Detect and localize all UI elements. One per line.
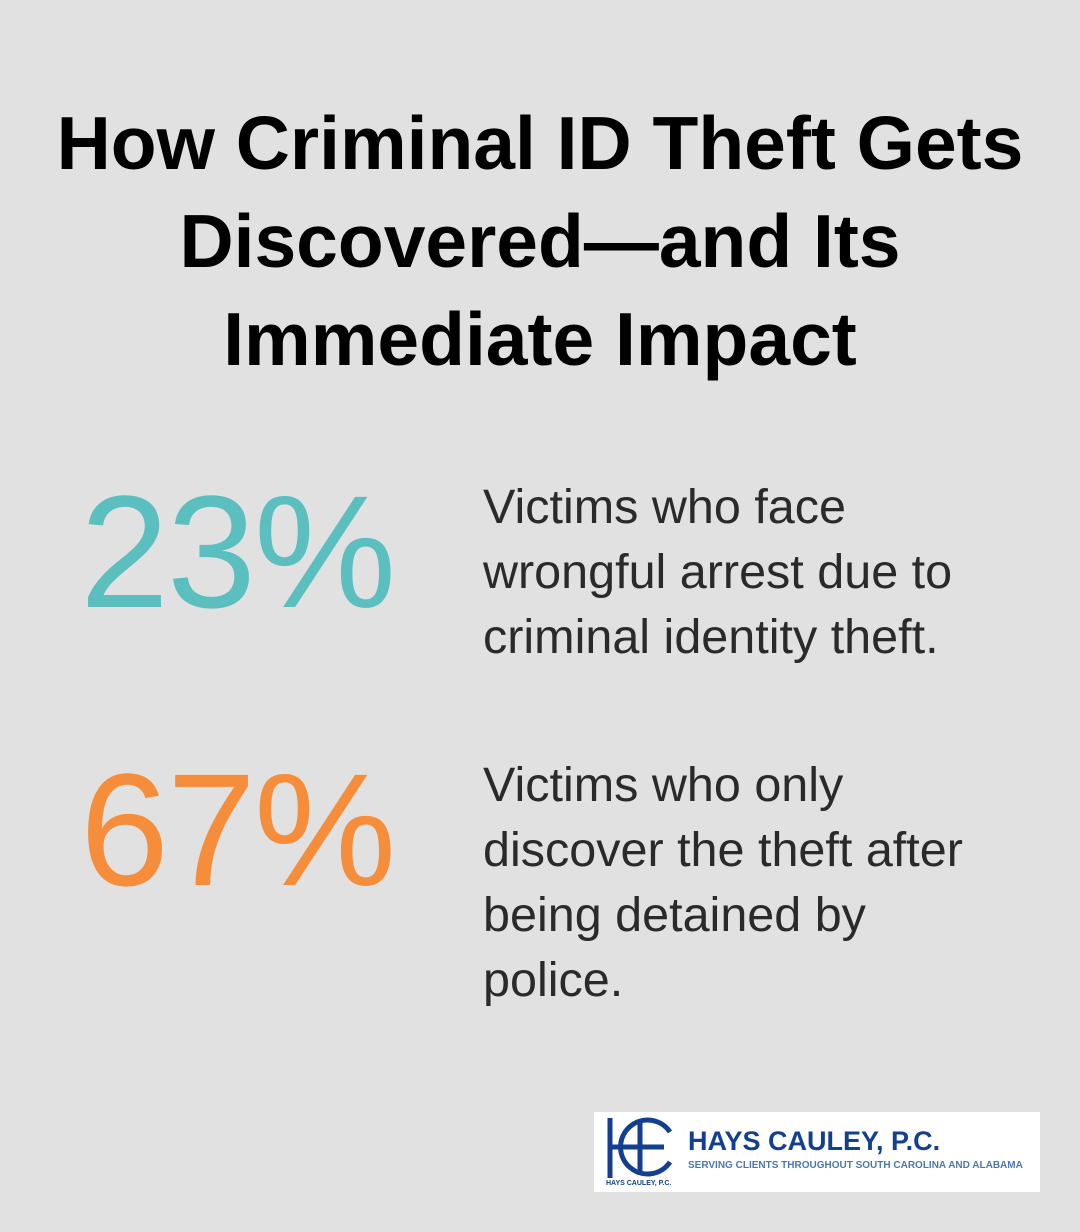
description: 67%: police. [483, 953, 623, 1007]
description: 67%: discover the theft after [483, 823, 963, 877]
logo [594, 1112, 1040, 1192]
logo: HAYS CAULEY, P.C. [688, 1126, 940, 1156]
stat: 67%: 67% [80, 740, 394, 919]
logo: HAYS CAULEY, P.C. [606, 1180, 671, 1187]
description: 23%: criminal identity theft. [483, 610, 939, 664]
title: Immediate Impact [223, 297, 857, 381]
description: 23%: Victims who face [483, 480, 846, 534]
description: 67%: Victims who only [483, 758, 843, 812]
title [57, 101, 1023, 381]
icon: HC monogram [608, 1118, 672, 1178]
logo: SERVING CLIENTS THROUGHOUT SOUTH CAROLINA AND ALABAMA [688, 1160, 1023, 1171]
description: 67% [483, 758, 963, 1007]
title: How Criminal ID Theft Gets [57, 101, 1023, 185]
title: Discovered—and Its [179, 199, 901, 283]
description: 23% [483, 480, 952, 664]
description: 23%: wrongful arrest due to [483, 545, 952, 599]
description: 67%: being detained by [483, 888, 866, 942]
stat: 23%: 23% [80, 462, 394, 641]
